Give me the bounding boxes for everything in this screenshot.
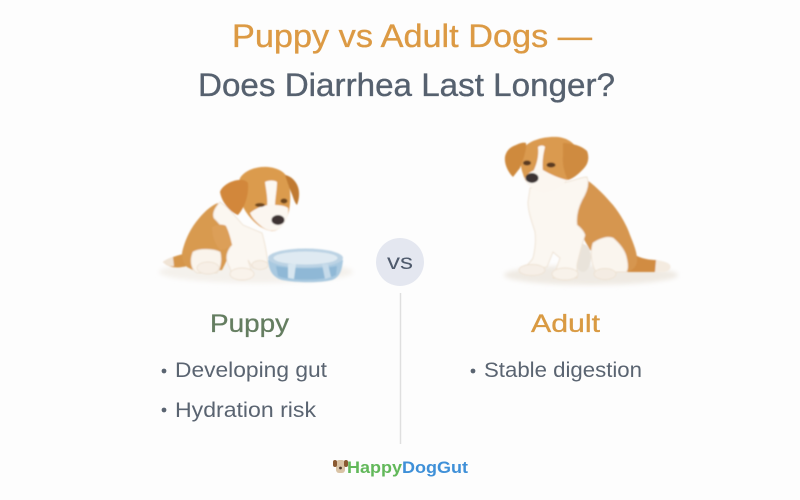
panel: adult [471, 310, 642, 382]
puppy right ear [285, 175, 299, 205]
puppy bullet list: Developing gut [175, 358, 327, 382]
puppy tail [163, 254, 187, 267]
adult left ear [505, 143, 526, 177]
ground shadow [504, 265, 678, 285]
adult blaze [533, 146, 545, 172]
title: Puppy vs Adult Dogs — [232, 18, 592, 54]
puppy left ear [220, 180, 248, 215]
adult body [576, 180, 637, 272]
ground shadow [159, 261, 353, 283]
adult haunch [591, 237, 628, 272]
adult gap shadow [575, 244, 591, 272]
adult head [521, 137, 578, 191]
puppy muzzle [250, 205, 288, 231]
adult chest and legs [520, 177, 588, 278]
icon: dog face [333, 460, 348, 473]
adult nose [526, 173, 538, 183]
illustration: puppy with water bowl [159, 167, 353, 283]
adult bullet list: Stable digestion [484, 358, 642, 382]
adult right ear [563, 143, 588, 180]
puppy bullet list [162, 358, 327, 422]
puppy eyes [255, 203, 265, 207]
puppy head [239, 167, 290, 231]
puppy haunch [191, 249, 221, 273]
title [198, 18, 615, 103]
adult heading: Adult [531, 310, 600, 338]
puppy paws [197, 262, 219, 274]
puppy nose [272, 215, 284, 225]
adult eyes [523, 160, 531, 166]
logo: HappyDogGut [347, 458, 468, 477]
puppy bullet list: Hydration risk [175, 398, 316, 422]
puppy body [182, 203, 234, 272]
adult muzzle [525, 169, 567, 192]
panel: puppy [162, 310, 327, 422]
adult tail [628, 252, 660, 272]
puppy chest and legs [213, 202, 268, 278]
illustration: adult dog [504, 137, 678, 285]
puppy blaze [265, 180, 277, 207]
water bowl [268, 248, 343, 282]
adult paws [519, 264, 545, 276]
vs badge [376, 238, 424, 286]
vs badge: vs [387, 251, 413, 274]
title: Does Diarrhea Last Longer? [198, 67, 615, 103]
puppy heading: Puppy [210, 310, 290, 338]
puppy coat patch [212, 225, 232, 250]
